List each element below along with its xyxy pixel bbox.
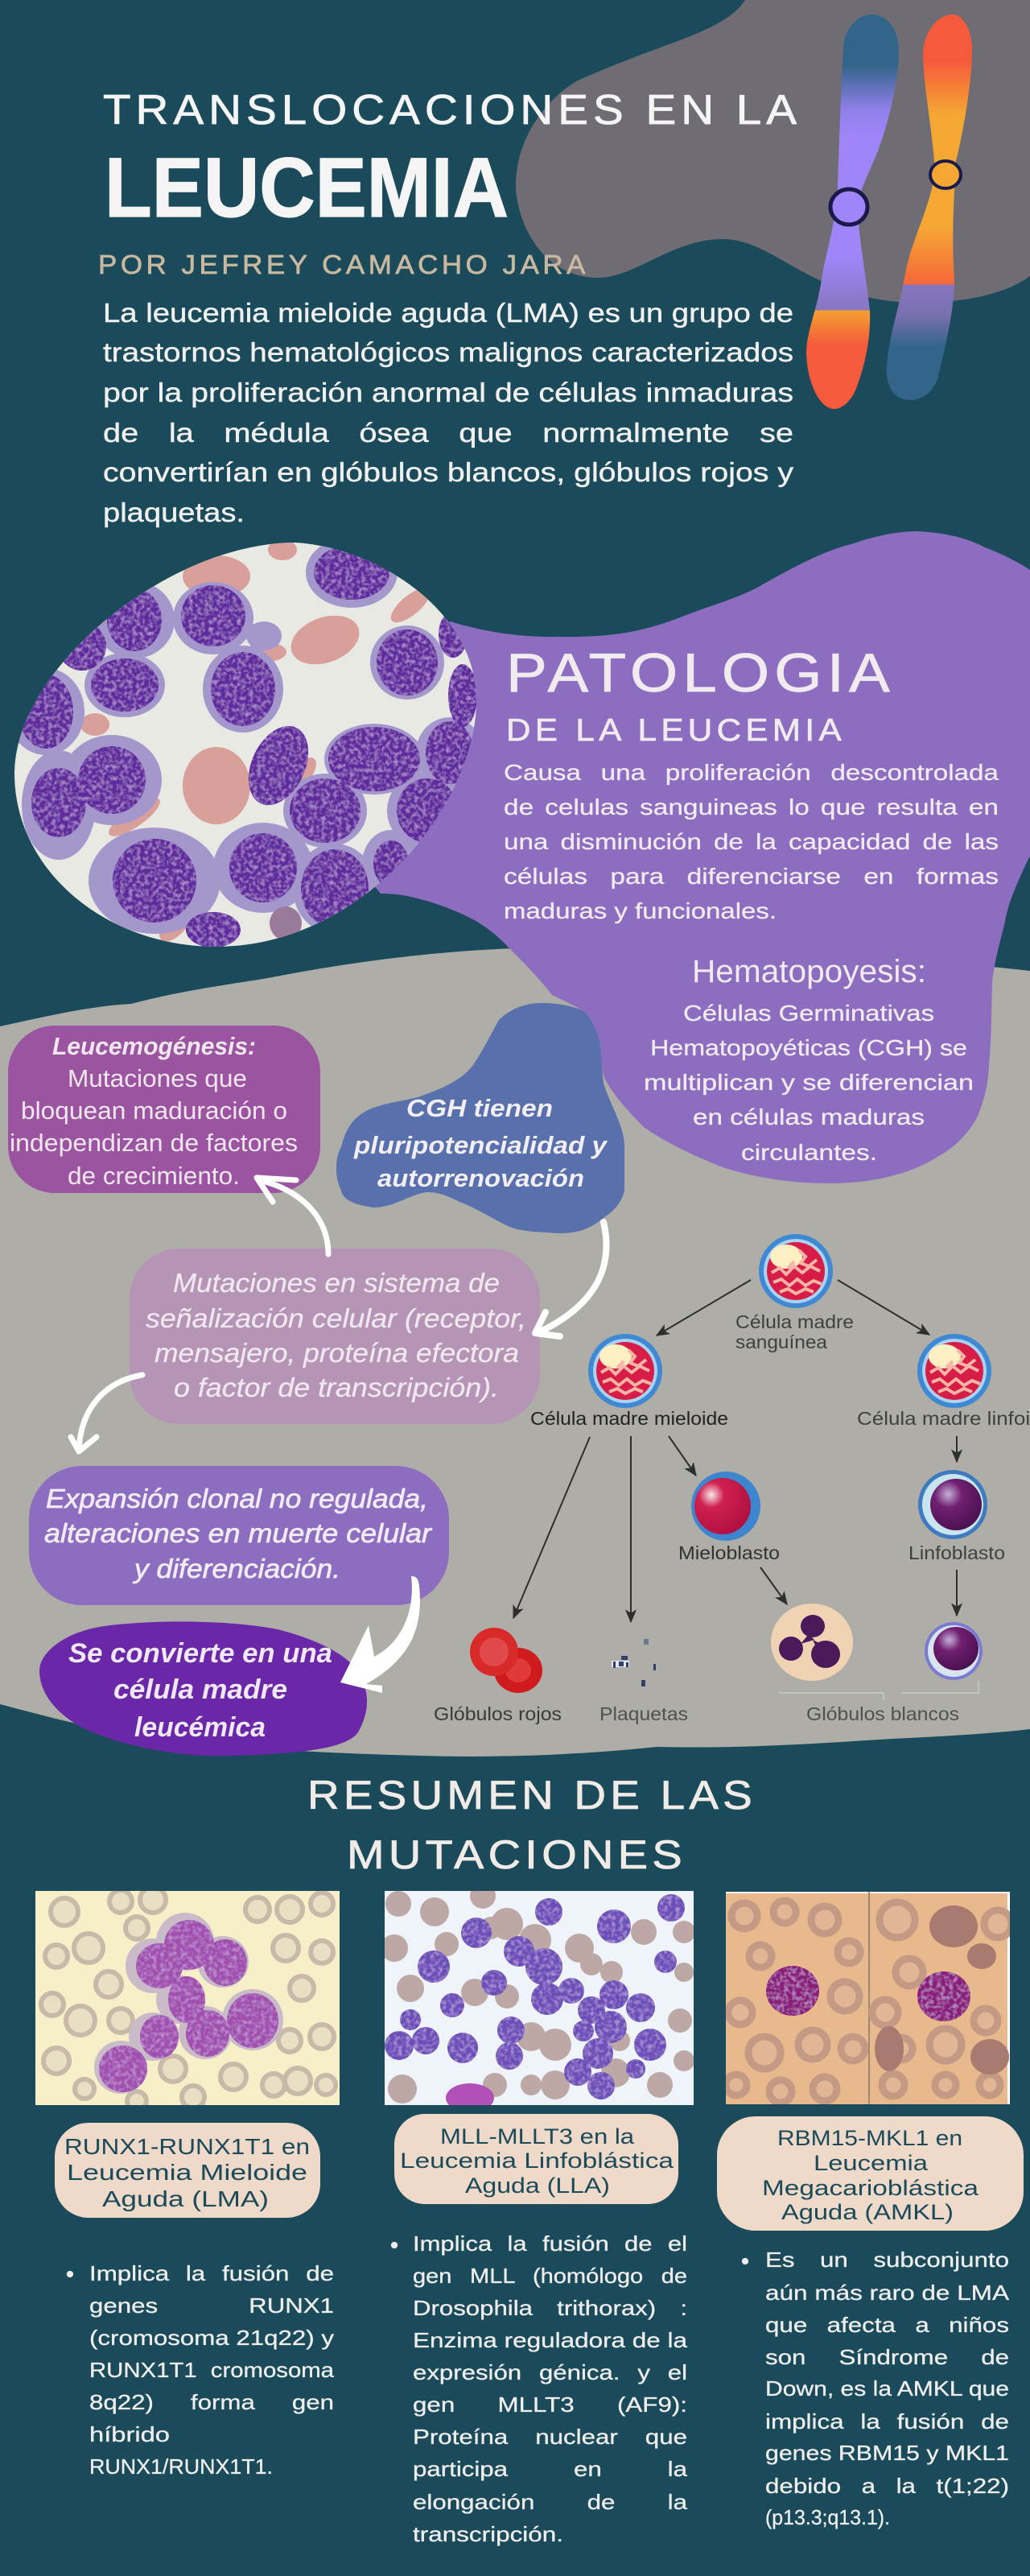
callout: expansion clonal: y diferenciación. [133,1554,340,1583]
intro paragraph [103,298,794,527]
intro paragraph: convertirían en glóbulos blancos, glóbulos rojos y [103,457,794,487]
callout: expansion clonal: alteraciones en muerte celular [44,1518,433,1548]
background band: grey [0,948,1030,1757]
intro paragraph: plaquetas. [103,497,245,527]
chromosome: red and blue [887,14,972,400]
column pill: MLL: MLL-MLLT3 en la [440,2124,635,2149]
labels: mature cells [434,1703,959,1724]
cell: stem blood cell [759,1234,833,1308]
text column: MLL: gen MLLT3 (AF9): [413,2392,687,2417]
column pill: RUNX1: RUNX1-RUNX1T1 en [64,2134,310,2159]
text column: RUNX1 [67,2261,335,2479]
intro paragraph: trastornos hematológicos malignos caracterizados [103,337,793,367]
callout: CGH blob: CGH tienen [406,1094,553,1122]
text column: RBM15: implica la fusión de [765,2409,1009,2434]
text column: RUNX1: híbrido [89,2422,170,2446]
title line: translocaciones: TRANSLOCACIONES EN LA [103,87,801,134]
labels: mature cells: Glóbulos blancos [806,1703,959,1724]
title: leucemia: LEUCEMIA [105,141,509,235]
labels: mature cells: Plaquetas [599,1703,688,1724]
callout: celula madre leucemica: célula madre [113,1674,287,1705]
pathology paragraph [504,760,999,923]
tree arrows [513,1280,957,1622]
text column: RBM15: debido a la t(1;22) [765,2474,1009,2498]
column pill: MLL [394,2114,678,2204]
chromosome: blue and red [806,14,899,409]
callout: celula madre leucemica [39,1621,367,1756]
text column: RUNX1: RUNX1T1 cromosoma [89,2358,335,2382]
background blob: grey [516,0,1030,303]
red cells [80,539,435,947]
text column: RBM15: genes RBM15 y MKL1 [765,2441,1009,2465]
text column: RBM15: Down, es la AMKL que [765,2376,1009,2401]
micrograph: AMKL [726,1891,1011,2105]
column pill: RUNX1: Aguda (LMA) [102,2186,269,2211]
column pill: RBM15: RBM15-MKL1 en [777,2126,962,2150]
text column: RBM15: Es un subconjunto [765,2248,1009,2272]
callout: celula madre leucemica: leucémica [134,1712,266,1743]
callout: mutaciones: Mutaciones en sistema de [173,1268,500,1298]
label: mieloblasto: Mieloblasto [678,1542,780,1563]
pathology paragraph: de celulas sanguineas lo que resulta en [504,795,999,819]
text column: RBM15: son Síndrome de [765,2345,1009,2369]
column pill: RBM15 [717,2116,1024,2231]
callout: expansion clonal [29,1466,449,1605]
text column: MLL: Implica la fusión de el [413,2231,687,2256]
cell: neutrophil [771,1604,853,1681]
callout: expansion clonal: Expansión clonal no regulada, [46,1484,428,1513]
hematopoyesis text: Células Germinativas [683,1001,934,1026]
column pill: MLL: Aguda (LLA) [465,2174,610,2198]
cell: platelets [612,1639,656,1686]
text column: RBM15: que afecta a niños [765,2313,1009,2337]
arrow: to leukemic stem cell [340,1576,420,1693]
column pill: RUNX1: Leucemia Mieloide [67,2160,307,2185]
labels: mature cells: Glóbulos rojos [434,1703,562,1724]
callout: mutaciones [130,1249,540,1424]
label: celula madre mieloide: Célula madre mieloide [530,1408,728,1429]
arrow: to expansion clonal [71,1375,142,1451]
pathology paragraph: células para diferenciarse en formas [504,864,999,889]
callout: leucemogenesis: independizan de factores [10,1129,298,1157]
panel subheading: de la leucemia: DE LA LEUCEMIA [506,713,846,748]
text column: MLL [391,2231,688,2546]
text column: MLL: expresión génica. y el [413,2360,687,2384]
cell: red blood cells [470,1628,542,1693]
label: celula madre sanguinea: sanguínea [735,1331,827,1352]
text column: RBM15 [742,2248,1010,2529]
hematopoyesis text: circulantes. [741,1140,877,1165]
column pill: MLL: Leucemia Linfoblástica [400,2149,674,2173]
nuclei [19,545,477,947]
author byline: POR JEFREY CAMACHO JARA [98,250,589,279]
callout: mutaciones: o factor de transcripción). [174,1373,499,1402]
pathology paragraph: Causa una proliferación descontrolada [504,760,999,785]
pathology paragraph: maduras y funcionales. [504,898,777,923]
cell: lymphoblast [918,1470,987,1539]
text column: RUNX1: genes RUNX1 [89,2293,334,2318]
text column: RBM15: aún más raro de LMA [765,2281,1010,2305]
text column: MLL: gen MLL (homólogo de [413,2264,687,2288]
hematopoyesis heading: Hematopoyesis: [692,954,926,989]
column pill: RBM15: Aguda (AMKL) [781,2200,954,2224]
hematopoyesis text: en células maduras [693,1104,925,1129]
callout: leucemogenesis: de crecimiento. [68,1162,240,1190]
callout: CGH blob: pluripotencialidad y [353,1131,608,1159]
pathology paragraph: una disminución de la capacidad de las [504,829,999,854]
cell: myeloid stem [588,1334,662,1408]
arrow: to leucemogenesis [257,1178,328,1254]
hematopoyesis text: Hematopoyéticas (CGH) se [650,1035,967,1060]
text column: MLL: Drosophila trithorax) : [413,2296,687,2320]
text column: MLL: participa en la [413,2457,688,2481]
intro paragraph: La leucemia mieloide aguda (LMA) es un grupo de [103,298,793,328]
callout: CGH blob: autorrenovación [377,1164,584,1192]
section heading: resumen de las mutaciones: MUTACIONES [347,1832,686,1877]
column pill: RBM15: Megacarioblástica [762,2176,979,2200]
panel: purple pathology blob [241,531,1030,1183]
callout: celula madre leucemica: Se convierte en una [68,1638,332,1669]
callout: mutaciones: señalización celular (receptor, [146,1303,526,1333]
callout: leucemogenesis: Leucemogénesis: [52,1032,256,1060]
intro paragraph: por la proliferación anormal de células inmaduras [103,378,793,407]
cytoplasm [7,537,484,934]
text column: RBM15: (p13.3;q13.1). [765,2505,890,2529]
micrograph: LLA [381,1883,695,2112]
callout: mutaciones: mensajero, proteína efectora [154,1338,519,1368]
hematopoyesis text: multiplican y se diferencian [644,1070,974,1095]
text column: MLL: transcripción. [413,2522,563,2546]
cell: lymphocyte [925,1622,983,1680]
callout: CGH blob [336,1003,624,1233]
micrograph: LMA [35,1887,340,2111]
text column: MLL: Enzima reguladora de la [413,2328,688,2352]
text column: RUNX1: (cromosoma 21q22) y [89,2326,334,2350]
micrograph: leukemia cells circle [7,535,484,954]
label: celula madre linfoide: Célula madre linfoide [857,1408,1030,1429]
text column: RUNX1: Implica la fusión de [89,2261,334,2285]
callout: leucemogenesis: Mutaciones que [68,1064,247,1092]
cell: mieloblast [691,1472,760,1541]
text column: RUNX1: 8q22) forma gen [89,2390,334,2414]
diagram: hematopoiesis tree [434,1234,1030,1724]
text column: MLL: Proteína nuclear que [413,2425,687,2449]
text column: RUNX1: RUNX1/RUNX1T1. [89,2454,273,2479]
callout: leucemogenesis: bloquean maduración o [21,1096,287,1125]
label: linfoblasto: Linfoblasto [908,1542,1005,1563]
arrow: to mutaciones [535,1222,607,1336]
section heading: resumen de las mutaciones: RESUMEN DE LAS [307,1773,756,1818]
cell: lymphoid stem [917,1334,991,1408]
callout: leucemogenesis [8,1026,320,1193]
column pill: RUNX1 [55,2123,320,2218]
panel heading: patologia: PATOLOGIA [506,642,895,704]
text column: MLL: elongación de la [413,2490,688,2514]
hematopoyesis text [644,1001,974,1165]
label: celula madre sanguinea [735,1311,854,1352]
section heading: resumen de las mutaciones [307,1773,756,1877]
label: celula madre sanguinea: Célula madre [735,1311,854,1332]
column pill: RBM15: Leucemia [814,2151,929,2175]
intro paragraph: de la médula ósea que normalmente se [103,418,793,448]
